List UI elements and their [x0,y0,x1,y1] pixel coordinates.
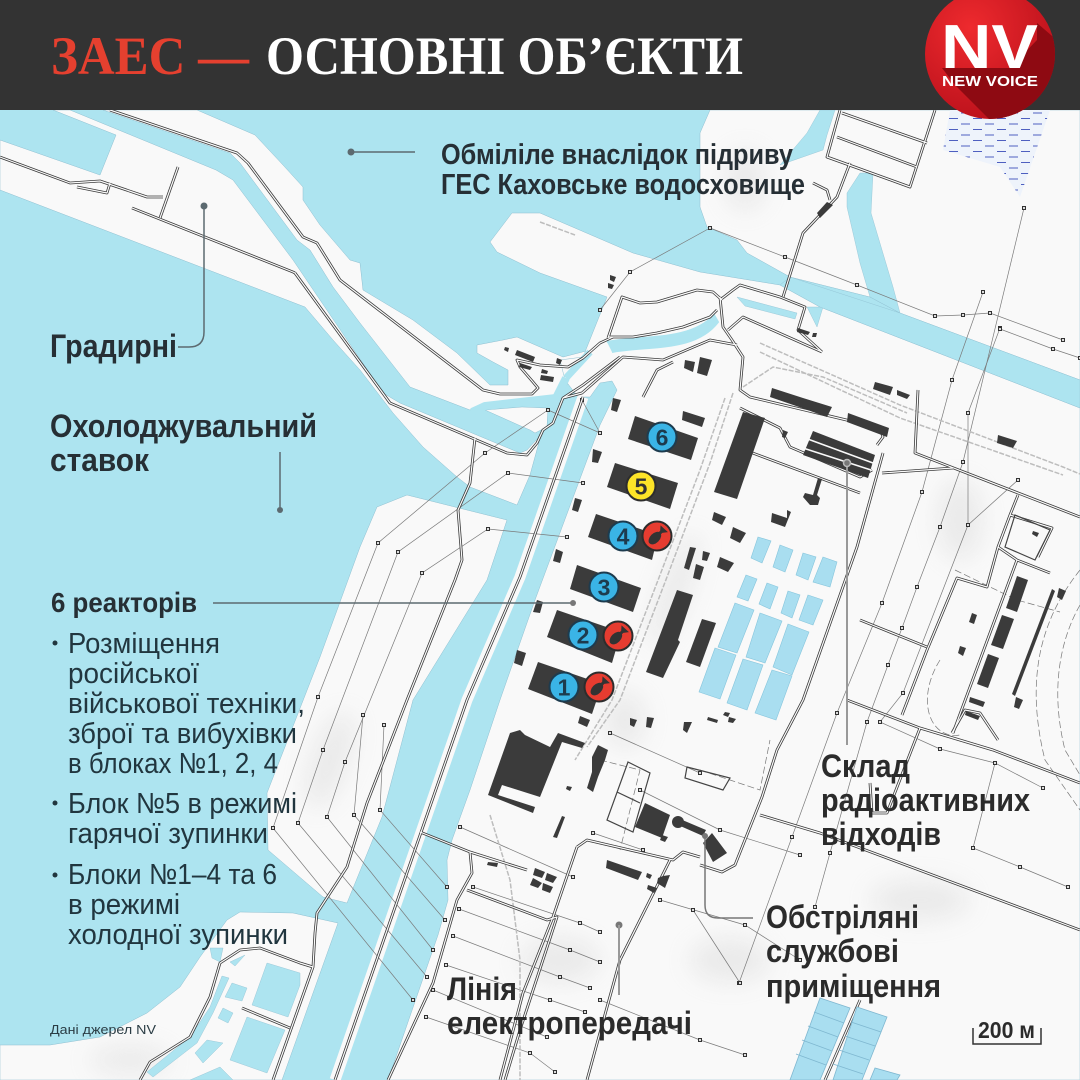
label: radioactive waste storage: відходів [821,816,941,852]
leader: power line [616,922,622,995]
power lines [273,208,1080,1072]
label: shelled service rooms: службові [766,933,899,969]
NV logo: NV [941,13,1038,82]
bomb icon reactor 4 [642,522,672,550]
label: cooling pond: ставок [50,442,150,478]
reactors bullet list: Розміщення [68,628,220,660]
reactors bullet list: зброї та вибухівки [68,718,297,750]
reactor 2 marker [568,620,598,650]
NV logo [925,0,1055,119]
header bar [0,0,1080,110]
bomb icon reactor 2 [604,622,632,650]
label: power line: Лінія [447,971,517,1007]
south ponds [790,998,900,1080]
reactor 5 marker: 5 [635,474,648,500]
terrain shading [90,150,982,1074]
reactors bullet list: в режимі [68,889,180,921]
scale bar: 200 м [978,1017,1035,1043]
leader: waste storage [844,460,850,745]
reactors bullet list: холодної зупинки [68,919,288,951]
reactor 3 marker: 3 [598,574,610,600]
NV logo: NEW VOICE [942,73,1038,90]
road strip through the canal [335,397,583,1080]
leader: reactors [213,600,576,606]
thin water channels [472,315,718,412]
label: power line: електропередачі [447,1005,692,1041]
light blue cooling tanks [699,537,837,720]
bomb icon reactor 1 [584,672,614,702]
label: shelled service rooms [766,899,941,1004]
reactor 6 marker [648,422,676,452]
label: cooling pond: Охолоджувальний [50,408,317,444]
reactor 5 marker [626,472,656,500]
label: reservoir: Обміліле внаслідок підриву [441,139,793,171]
reactor 4 marker [608,522,638,550]
label: radioactive waste storage: Склад [821,748,910,784]
compound outlines [607,515,1050,832]
reactor 2 marker: 2 [577,622,589,648]
label: radioactive waste storage: радіоактивних [821,782,1030,818]
title: ОСНОВНІ ОБ’ЄКТИ [266,26,743,86]
radioactive waste storage building [803,431,875,478]
reactor buildings [528,416,698,714]
leader: cooling towers [178,202,208,347]
reactor 4 marker: 4 [617,524,630,550]
reactors bullet list [52,628,305,951]
reactors bullet list: Блок №5 в режимі [68,788,297,820]
marsh area [943,110,1050,197]
label: radioactive waste storage [821,748,1030,852]
reactors bullet list: в блоках №1, 2, 4 [68,748,278,780]
label: reservoir: ГЕС Каховське водосховище [441,169,805,201]
rail tracks [490,222,1080,1080]
heading: 6 reactors: 6 реакторів [51,587,197,618]
reactors bullet list: російської [68,658,199,690]
title [51,26,743,86]
title: ЗАЕС — [51,26,250,86]
reactor 6 marker: 6 [656,424,668,450]
source note: Дані джерел NV [50,1022,156,1037]
reactors bullet list: Блоки №1–4 та 6 [68,859,277,891]
leader: reservoir [348,148,415,156]
reactor 3 marker [590,572,618,602]
reactor 1 marker: 1 [558,674,571,700]
label: cooling towers: Градирні [50,328,177,364]
label: reservoir [441,139,805,201]
reactors bullet list: військової техніки, [68,688,305,720]
dark buildings [487,202,1066,893]
label: shelled service rooms: приміщення [766,968,941,1004]
reactor 1 marker [550,672,578,702]
leader: cooling pond [277,452,283,513]
water bodies on land [147,110,1080,1080]
label: cooling pond [50,408,317,478]
reactors bullet list: гарячої зупинки [68,818,268,850]
leader: shelled service rooms [702,833,753,918]
label: power line [447,971,692,1041]
label: shelled service rooms: Обстріляні [766,899,919,935]
